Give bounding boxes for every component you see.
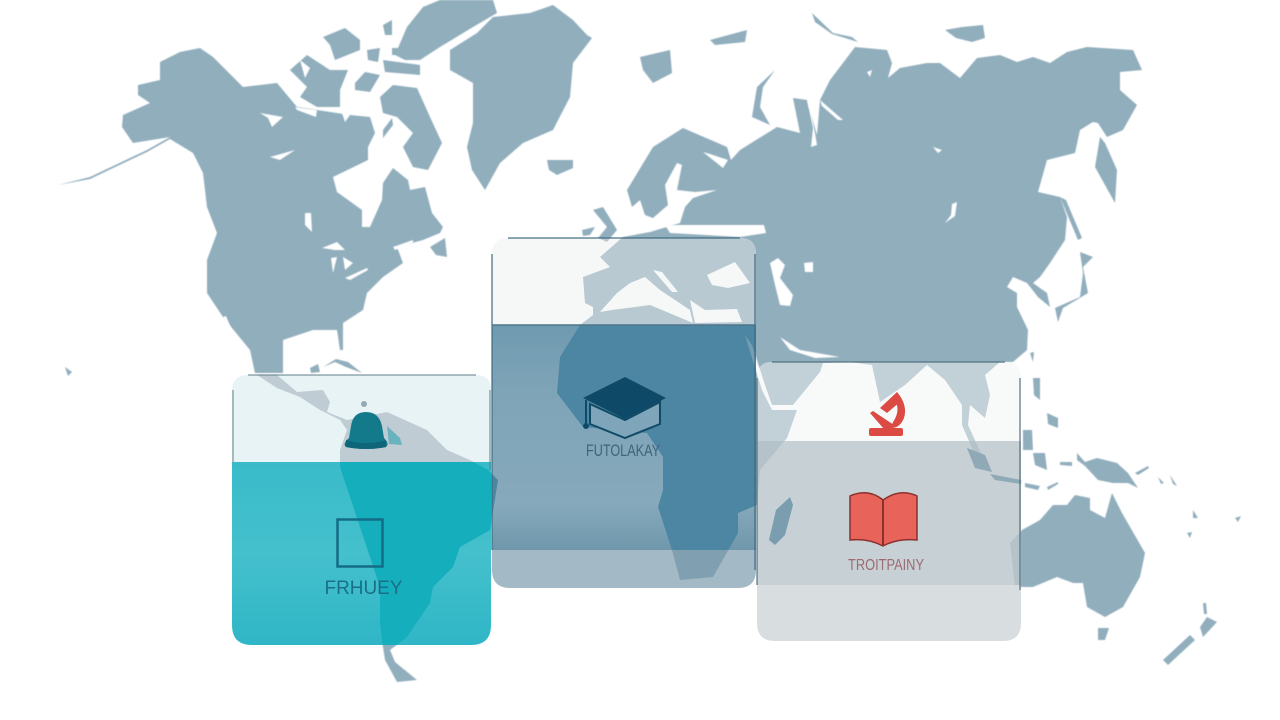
sakhalin strip [1060, 197, 1082, 240]
small islands [65, 367, 1241, 538]
map water details [223, 60, 1095, 358]
panel: left [232, 374, 491, 645]
panel top section [492, 238, 756, 324]
kamchatka [1095, 137, 1117, 203]
newfoundland [430, 238, 447, 257]
icon: open book [850, 493, 917, 546]
iceland [547, 160, 573, 175]
label: right panel: TROITPAINY [848, 557, 924, 574]
panel top section [757, 362, 1009, 441]
icon: microscope [869, 392, 905, 436]
japan [1055, 252, 1093, 322]
icon: bell [345, 401, 402, 449]
label: centre panel: FUTOLAKAY [586, 441, 660, 460]
panel middle section [492, 326, 756, 550]
new guinea [1077, 453, 1149, 488]
arctic islands [290, 0, 497, 170]
panel middle section [757, 441, 1021, 585]
new zealand [1163, 603, 1217, 665]
central and south america [257, 375, 498, 682]
panel: right [756, 361, 1021, 641]
label: left panel: FRHUEY [324, 578, 403, 599]
panel: centre [491, 237, 756, 588]
sumatra [967, 448, 1021, 484]
icon: graduation cap [583, 377, 666, 438]
panel outline [492, 238, 755, 570]
panel outline [757, 362, 1020, 590]
icon: empty square [338, 520, 382, 566]
panel outline [233, 375, 490, 470]
madagascar [769, 497, 793, 545]
tasmania [1098, 628, 1109, 640]
panel top section [232, 375, 491, 462]
panel lower section [757, 585, 1021, 641]
eurasia and africa [557, 47, 1142, 580]
north america [58, 48, 443, 373]
southeast asia islands [967, 352, 1072, 490]
novaya zemlya [752, 70, 775, 125]
panel lower section [232, 462, 491, 645]
svalbard and arctic isles [640, 13, 985, 83]
greenland [450, 5, 592, 190]
caribbean islands [310, 359, 362, 373]
australia [1010, 493, 1145, 617]
panel lower section [492, 550, 756, 588]
british isles [582, 207, 617, 242]
